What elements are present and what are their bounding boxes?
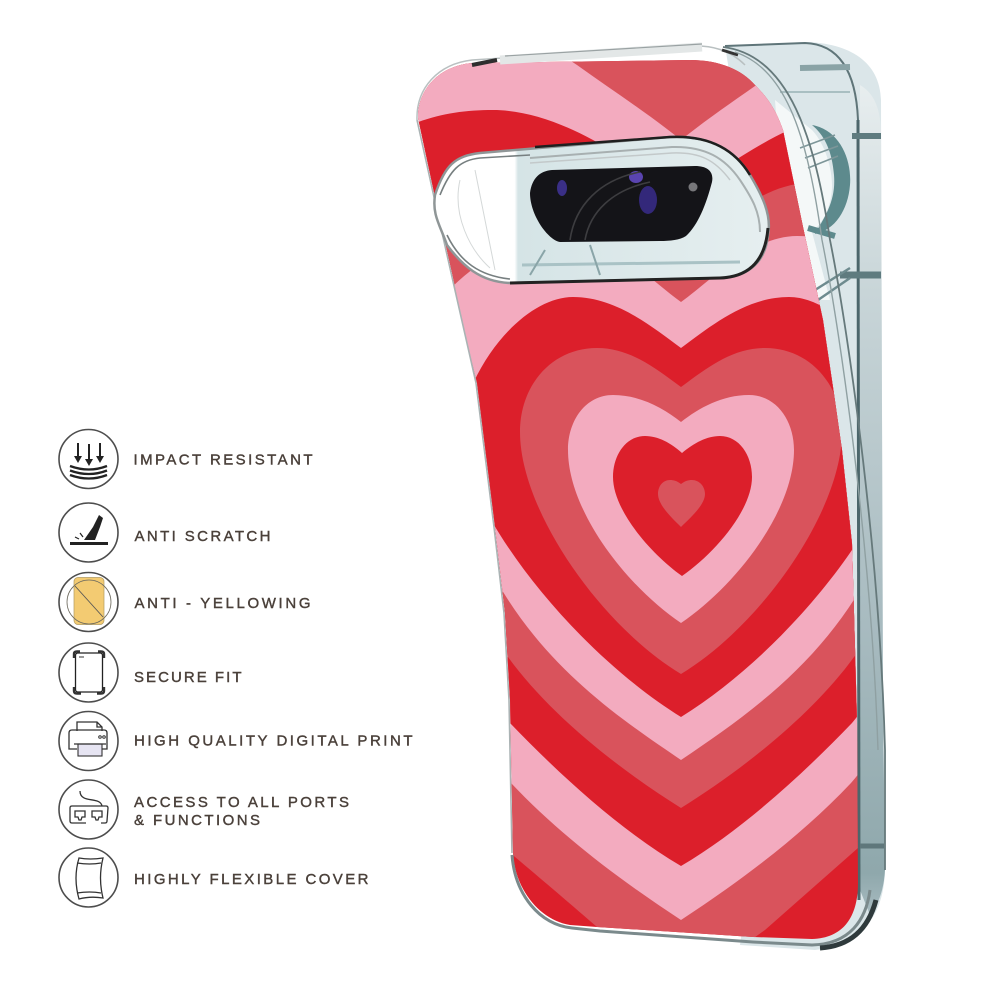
icon: yellow phone crossed out <box>67 578 111 624</box>
feature: highly flexible cover: HIGHLY FLEXIBLE COVER <box>134 871 369 888</box>
feature: anti yellowing <box>59 572 310 632</box>
feature: high quality digital print: HIGH QUALITY DIGITAL PRINT <box>134 732 412 750</box>
camera cutout of the case <box>434 137 769 283</box>
phone with clear case and printed skin <box>416 42 886 950</box>
feature: high quality digital print <box>59 712 412 770</box>
feature: secure fit: SECURE FIT <box>134 669 242 686</box>
feature: impact resistant <box>59 430 312 488</box>
phone body behind the case <box>725 42 885 950</box>
feature: anti yellowing: ANTI - YELLOWING <box>134 595 310 612</box>
icon: impact arrows and layers <box>70 443 107 478</box>
camera lens <box>530 166 712 242</box>
icon: blade scratching surface <box>70 515 108 545</box>
feature: anti scratch <box>59 503 270 562</box>
feature: access to all ports and functions <box>59 780 349 839</box>
feature: highly flexible cover <box>59 848 369 907</box>
feature: anti scratch: ANTI SCRATCH <box>134 528 270 545</box>
printed skin with concentric hearts <box>418 60 858 939</box>
feature: access to all ports and functions: ACCESS TO ALL PORTS <box>134 794 349 811</box>
icon: port block with cable <box>70 791 108 823</box>
rear camera ring <box>812 125 850 234</box>
icon: phone with bumper corners <box>74 652 104 694</box>
feature: impact resistant: IMPACT RESISTANT <box>134 452 312 468</box>
icon: bent flexible cover <box>76 858 103 899</box>
clear case outline <box>417 44 885 948</box>
icon: printer <box>69 722 107 756</box>
feature: secure fit <box>59 643 242 702</box>
feature: access to all ports and functions: & FUNCTIONS <box>134 812 260 829</box>
